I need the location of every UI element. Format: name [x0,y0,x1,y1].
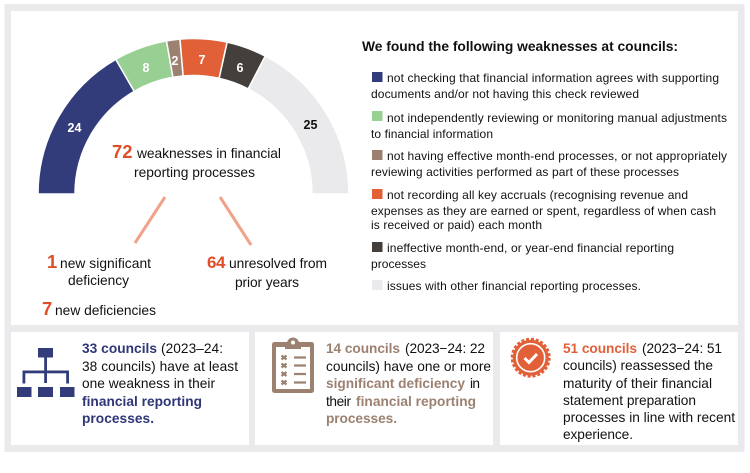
icon: rosette badge with tick [512,339,549,376]
legend [371,71,727,293]
text: 51 councils [563,341,735,442]
total weaknesses text: reporting processes [134,165,255,180]
connector: left line [135,197,165,243]
text: 14 councils: financial reporting [356,394,476,409]
icon: organisation chart [17,348,74,397]
legend item: brown [371,149,727,179]
new deficiencies text: new deficiencies [55,303,156,318]
gauge value labels: 2 [172,54,179,68]
unresolved text: unresolved from [229,256,327,271]
panel: 33 councils [11,332,249,445]
text: 33 councils: 33 councils [82,341,157,356]
legend item: green: not independently reviewing or monitoring manual adjustments [387,111,727,125]
text: 33 councils: processes. [82,411,154,426]
text: 33 councils: financial reporting [82,394,202,409]
text: 51 councils: maturity of their financial [563,376,712,391]
legend item: dark [371,241,674,271]
text: 33 councils [82,341,238,426]
unresolved text: prior years [235,275,299,290]
legend item: orange: is received or paid) each month [371,218,542,232]
text: 14 councils: processes. [326,411,397,426]
gauge value labels: 24 [68,121,81,135]
new deficiencies text: 7 [42,298,52,319]
legend item: navy [371,71,719,101]
text: 33 councils: one weakness in their [82,376,215,391]
legend item: green [371,111,727,141]
total weaknesses text [112,141,281,180]
legend heading: We found the following weaknesses at councils: [362,39,678,54]
connector: right line [220,197,251,245]
text: 33 councils: 38 councils) have at least [82,359,238,374]
new deficiencies text: deficiency [68,273,129,288]
legend item: orange [371,188,716,232]
panel: 14 councils [255,332,493,445]
text: 51 councils: experience. [563,427,633,442]
legend item: brown: not having effective month-end processes, or not appropriately [387,149,727,163]
text: 14 councils [326,341,491,426]
text: 14 councils: their [326,394,351,409]
text: 51 councils: (2023−24: 51 [642,341,722,356]
text: 14 councils: significant deficiency [326,376,465,391]
new deficiencies text: new significant [60,256,151,271]
text: 33 councils: (2023–24: [161,341,223,356]
gauge value labels: 6 [237,61,244,75]
text: 51 councils: councils) reassessed the [563,358,713,373]
text: 14 councils: 14 councils [326,341,400,356]
icon: clipboard checklist [272,338,314,393]
legend item: navy: documents and/or not having this check reviewed [371,87,639,101]
gauge value labels: 7 [199,53,206,67]
chart: semicircular gauge of 72 weaknesses [38,38,349,194]
total weaknesses text: 72 [112,141,132,162]
new deficiencies text: 1 [47,251,57,272]
text: 14 councils: councils) have one or more [326,359,491,374]
legend item: orange: expenses as they are earned or spent, regardless of when cash [371,204,716,218]
text: 14 councils: (2023−24: 22 [405,341,485,356]
new deficiencies text [42,251,156,319]
gauge value labels: 8 [143,61,150,75]
legend item: orange: not recording all key accruals (recognising revenue and [387,188,688,202]
legend item: dark: ineffective month-end, or year-end financial reporting [387,241,674,255]
legend item: brown: reviewing activities performed as part of these processes [371,165,679,179]
unresolved text: 64 [207,253,226,272]
legend item: navy: not checking that financial information agrees with supporting [387,71,719,85]
panel: 51 councils [500,332,738,445]
legend item: green: to financial information [371,127,493,141]
panel: gauge and legend [11,11,738,325]
legend item: light grey: issues with other financial reporting processes. [387,279,641,293]
text: 14 councils: in [470,376,480,391]
text: 51 councils: processes in line with recent [563,410,735,425]
text: 51 councils: 51 councils [563,341,637,356]
legend item: dark: processes [371,257,426,271]
gauge value labels: 25 [304,118,317,132]
text: 51 councils: statement preparation [563,393,696,408]
unresolved text [207,253,327,290]
total weaknesses text: weaknesses in financial [136,146,281,161]
gauge value labels [68,53,317,135]
